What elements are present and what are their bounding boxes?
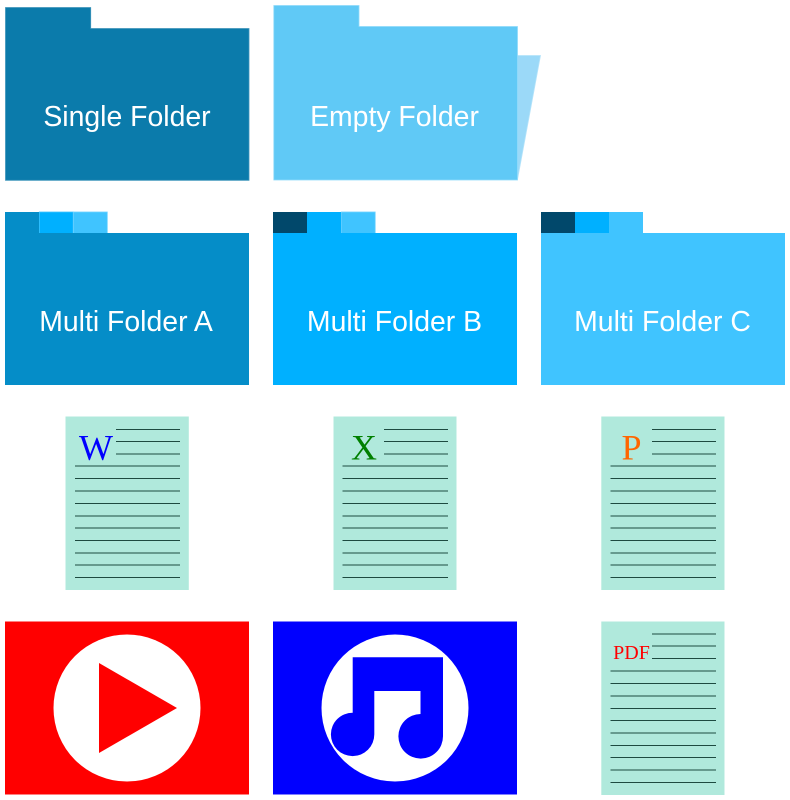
text lines [610, 430, 716, 578]
tab 2 [39, 212, 73, 234]
document: Word [66, 416, 189, 590]
folder: multi folder B [273, 212, 517, 385]
label: multi folder A: Multi Folder A [39, 306, 213, 338]
icon: video file [5, 622, 249, 794]
folder body [541, 212, 785, 385]
document: PDF [601, 622, 724, 795]
document: PowerPoint [601, 416, 724, 590]
document: Excel [334, 416, 456, 590]
letter X: X [351, 428, 377, 468]
label: multi folder B: Multi Folder B [307, 306, 482, 338]
label: multi folder C: Multi Folder C [574, 306, 751, 338]
letter W: W [79, 428, 113, 468]
tab 1 [273, 212, 307, 233]
music note [331, 657, 443, 759]
folder: empty folder [274, 6, 540, 180]
icon: audio file [273, 622, 517, 794]
folder: multi folder C [541, 212, 785, 385]
music circle [322, 634, 468, 782]
folder: multi folder A [5, 212, 249, 385]
label: empty folder: Empty Folder [310, 101, 479, 133]
empty folder back flap [518, 56, 540, 180]
play triangle [99, 663, 177, 753]
tab 2 [575, 212, 609, 233]
play circle [54, 634, 200, 782]
text lines [75, 430, 180, 578]
label: single folder: Single Folder [43, 101, 211, 133]
folder body [5, 212, 249, 385]
text lines [610, 634, 716, 782]
text lines [342, 430, 448, 578]
folder body [273, 212, 517, 385]
tab 3 [73, 212, 107, 234]
tab 1 [541, 212, 575, 233]
letter P: P [621, 428, 642, 468]
folder: single folder [6, 8, 249, 180]
empty folder front [274, 6, 518, 180]
tab 3 [341, 212, 375, 234]
letters PDF: PDF [613, 642, 650, 664]
